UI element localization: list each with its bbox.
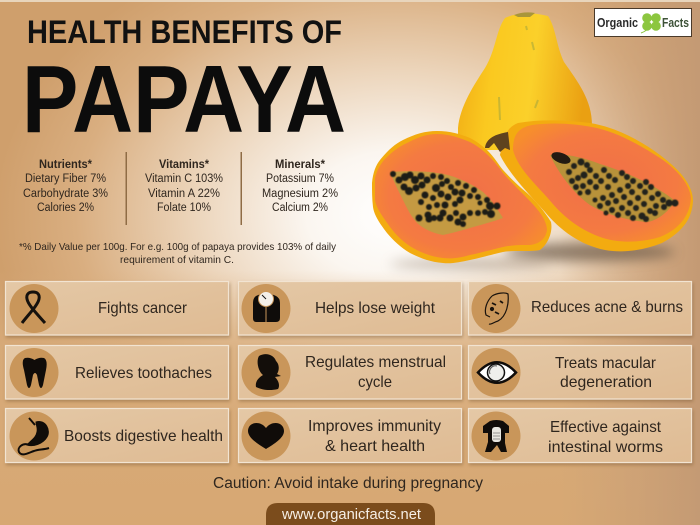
- benefit: effective against intestinal worms: intestinal worms: [548, 439, 663, 456]
- title: health benefits of: HEALTH BENEFITS OF: [27, 14, 342, 50]
- benefit: fights cancer: [6, 282, 228, 335]
- benefit: boosts digestive health: [6, 408, 228, 462]
- panel: vitamins: Vitamin A 22%: [148, 188, 220, 200]
- panel: vitamins: Vitamin C 103%: [145, 173, 223, 185]
- benefit: helps lose weight: [238, 282, 462, 335]
- panel: vitamins: Folate 10%: [157, 202, 211, 214]
- panel: minerals: Potassium 7%: [266, 173, 334, 185]
- papaya half: left: [372, 131, 551, 263]
- caution: Caution: Avoid intake during pregnancy: [213, 475, 483, 492]
- benefit: effective against intestinal worms: [468, 408, 692, 462]
- logo wordmark: Organic: [597, 16, 638, 30]
- website pill: www.organicfacts.net: [281, 507, 421, 523]
- panel: minerals: Magnesium 2%: [262, 188, 338, 200]
- footnote: *% Daily Value per 100g. For e.g. 100g of papaya provides 103% of daily: [19, 241, 337, 253]
- icon: face: [485, 293, 508, 324]
- panel: minerals: Minerals*: [275, 159, 326, 171]
- panel: vitamins: Vitamins*: [159, 159, 209, 171]
- benefit: improves immunity and heart health: [238, 408, 462, 462]
- benefit: reduces acne and burns: Reduces acne & burns: [531, 299, 683, 316]
- benefit: relieves toothaches: [6, 346, 228, 399]
- footnote: [19, 241, 337, 266]
- benefit: regulates menstrual cycle: [238, 346, 462, 399]
- icon: eye: [478, 362, 516, 383]
- benefit: helps lose weight: Helps lose weight: [315, 300, 436, 317]
- logo: [594, 8, 692, 36]
- benefit: improves immunity and heart health: Improves immunity: [308, 418, 441, 435]
- benefit: regulates menstrual cycle: cycle: [358, 374, 392, 391]
- benefit: relieves toothaches: Relieves toothaches: [75, 365, 212, 382]
- divider: vitamins and minerals: [240, 152, 242, 225]
- panel: minerals: Calcium 2%: [272, 202, 328, 214]
- divider: nutrients and vitamins: [126, 152, 127, 225]
- panel: minerals: [262, 159, 338, 214]
- icon: stomach: [19, 418, 49, 454]
- icon: ribbon: [22, 292, 45, 323]
- icon: tooth: [23, 358, 47, 388]
- whole papaya: [458, 12, 592, 150]
- benefit: fights cancer: Fights cancer: [98, 300, 188, 317]
- papaya half: right: [485, 120, 693, 251]
- icon: woman: [256, 354, 281, 390]
- panel: nutrients: Nutrients*: [39, 159, 93, 171]
- panel: nutrients: Calories 2%: [37, 202, 94, 214]
- seeds: left half: [390, 171, 500, 227]
- benefit: effective against intestinal worms: Effective against: [550, 419, 662, 436]
- benefit: treats macular degeneration: degeneration: [560, 374, 652, 391]
- benefit: boosts digestive health: Boosts digestive health: [64, 428, 223, 445]
- benefit: treats macular degeneration: [468, 346, 692, 399]
- benefit: regulates menstrual cycle: Regulates menstrual: [305, 354, 446, 371]
- icon: torso: [483, 420, 509, 452]
- icon: heart: [248, 423, 284, 449]
- panel: nutrients: Carbohydrate 3%: [23, 188, 108, 200]
- footnote: requirement of vitamin C.: [120, 254, 234, 266]
- website pill: [266, 503, 435, 525]
- title: papaya: PAPAYA: [22, 46, 346, 153]
- seeds: right half: [566, 158, 678, 222]
- panel: vitamins: [145, 159, 223, 214]
- stem: [485, 132, 510, 152]
- icon: scale: [253, 292, 280, 322]
- benefit: treats macular degeneration: Treats macular: [555, 355, 657, 372]
- benefit: reduces acne and burns: [468, 282, 692, 335]
- logo: Facts: [662, 16, 689, 30]
- icon: clover: [641, 13, 661, 33]
- benefit: improves immunity and heart health: & heart health: [325, 438, 425, 455]
- panel: nutrients: [23, 159, 108, 214]
- panel: nutrients: Dietary Fiber 7%: [25, 173, 106, 185]
- papaya illustration: [372, 12, 693, 269]
